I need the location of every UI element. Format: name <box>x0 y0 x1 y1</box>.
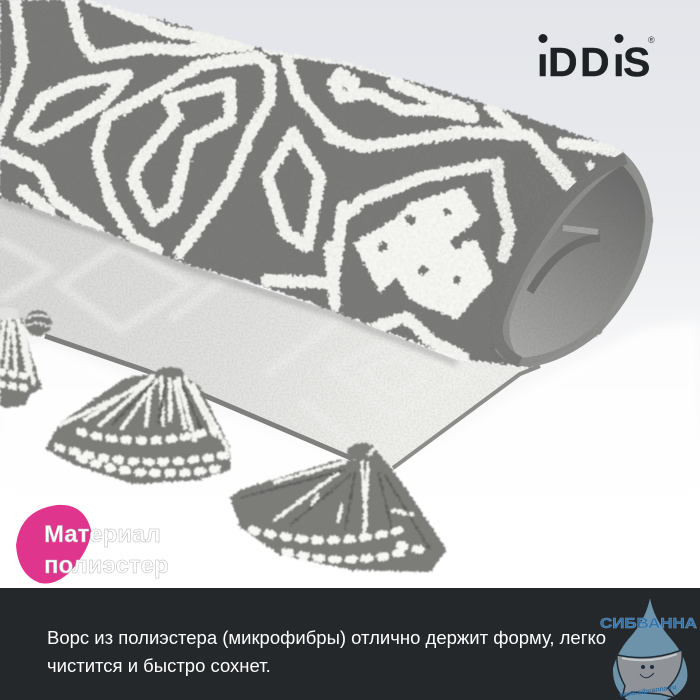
watermark url: www.sibvanna.ru <box>618 684 677 699</box>
backing side edge <box>393 366 540 468</box>
tassel centre <box>45 367 230 484</box>
watermark title: СИБВАННА <box>600 615 697 632</box>
rug backing <box>0 190 540 475</box>
logo registered mark: ® <box>648 35 655 45</box>
watermark bath rim <box>622 654 677 660</box>
footer text: Ворс из полиэстера (микрофибры) отлично держит форму, легко <box>47 627 606 648</box>
badge blob <box>16 505 91 584</box>
badge text: Материал <box>44 521 161 548</box>
logo wordmark: ı <box>537 39 548 85</box>
rug ornament <box>353 187 493 320</box>
footer band <box>0 588 700 700</box>
badge text: полиэстер <box>44 552 169 579</box>
logo wordmark: D <box>548 39 578 85</box>
tassel left <box>0 307 51 408</box>
logo wordmark <box>537 39 650 85</box>
watermark face <box>640 665 654 678</box>
badge text <box>44 521 169 579</box>
rug roll <box>0 0 660 370</box>
tassel right <box>230 443 447 572</box>
rug roll end <box>490 150 660 370</box>
logo wordmark: D <box>580 39 610 85</box>
footer text: чистится и быстро сохнет. <box>47 655 271 676</box>
badge: material <box>16 504 169 584</box>
backing edge <box>45 336 353 459</box>
logo: iddis <box>537 34 655 85</box>
logo dots <box>538 34 624 43</box>
logo wordmark: S <box>623 39 650 85</box>
watermark: sibvanna <box>600 598 697 700</box>
footer text <box>47 627 606 676</box>
logo wordmark: ı <box>613 39 624 85</box>
watermark bath <box>617 650 682 698</box>
watermark drop <box>613 598 687 700</box>
